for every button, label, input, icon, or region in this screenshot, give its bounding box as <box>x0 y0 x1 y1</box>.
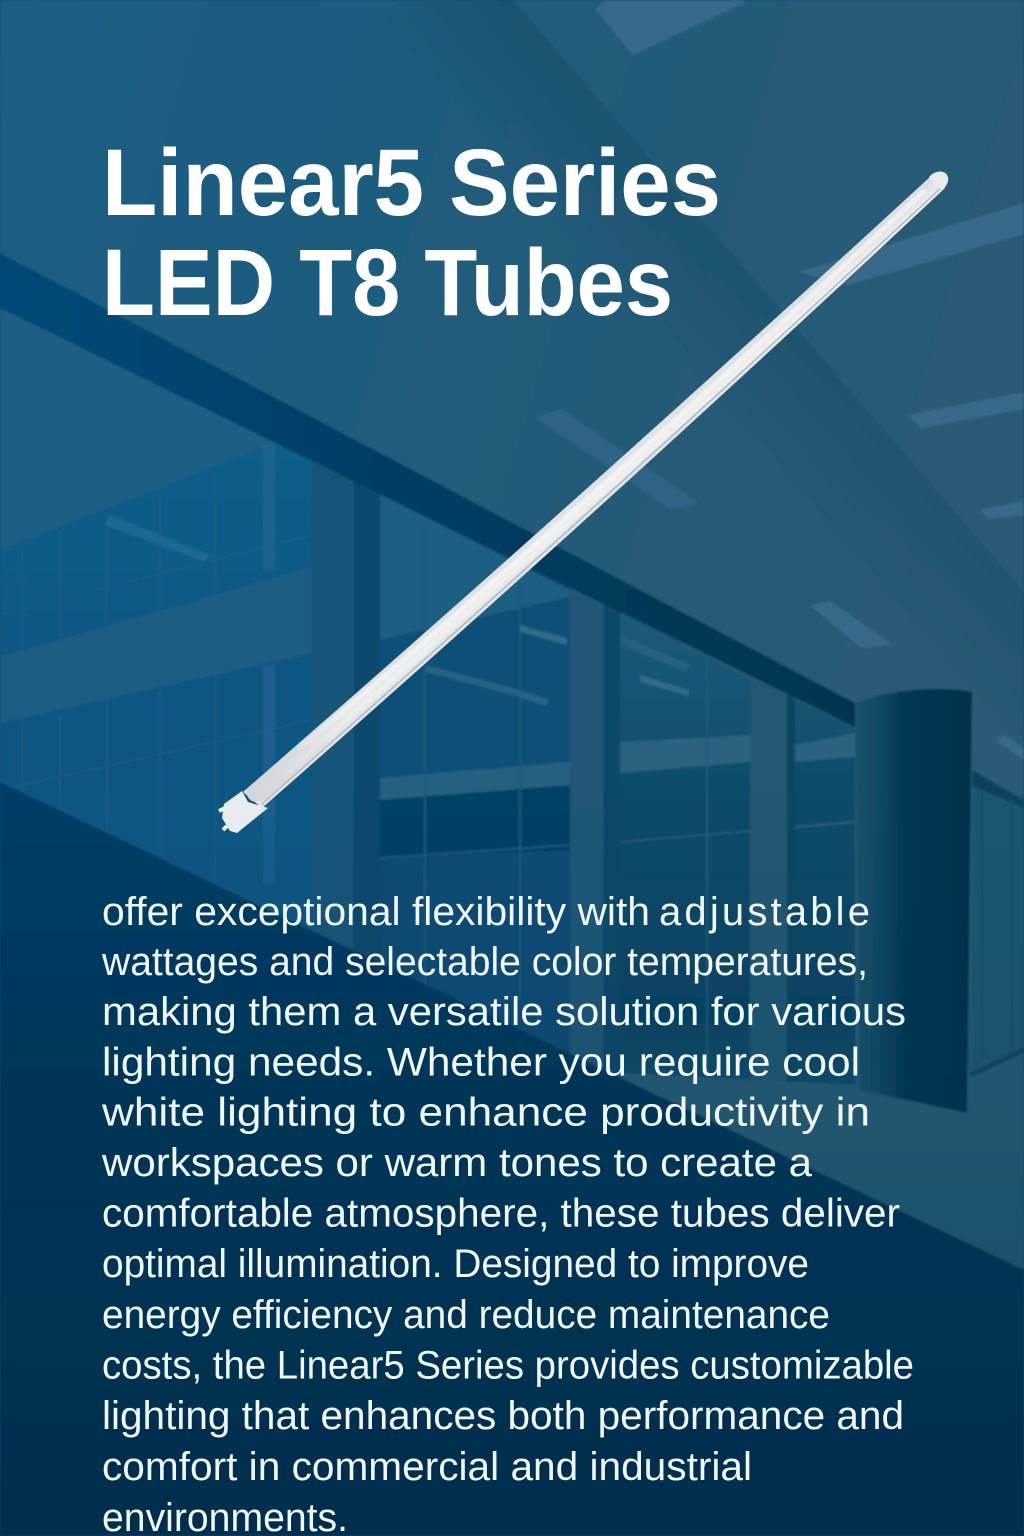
dark foreground wedge <box>0 782 1024 1536</box>
floor shadow line <box>970 1050 1024 1075</box>
body description: comfort in commercial and industrial <box>102 1445 752 1489</box>
centre window <box>380 494 570 1200</box>
LED T8 tube product image <box>219 171 948 833</box>
body description: costs, the Linear5 Series provides customizable <box>102 1344 914 1388</box>
body description: workspaces or warm tones to create a <box>101 1141 813 1185</box>
right window <box>620 612 750 1100</box>
tube body <box>243 176 945 808</box>
body description: adjustable <box>659 890 870 934</box>
left wall band <box>0 567 312 723</box>
body description: wattages and selectable color temperatures, <box>101 940 868 984</box>
tube lower edge line <box>262 186 943 804</box>
pillar <box>855 689 972 1113</box>
ceiling crease shading <box>300 0 1024 820</box>
body description <box>101 890 914 1536</box>
right wall and far windows <box>972 775 1024 1070</box>
tube centre highlight <box>300 190 925 748</box>
body description: lighting needs. Whether you require cool <box>102 1040 860 1084</box>
body description: comfortable atmosphere, these tubes deliver <box>102 1192 900 1236</box>
ceiling <box>0 0 1024 1100</box>
left upper window band <box>0 447 312 657</box>
body description: offer exceptional flexibility with <box>102 890 650 934</box>
ceiling light panels <box>535 0 1024 760</box>
milky cover near end <box>246 702 362 802</box>
body description: white lighting to enhance productivity in <box>101 1090 870 1134</box>
column three <box>750 678 787 1098</box>
column two <box>570 588 602 1208</box>
body description: energy efficiency and reduce maintenance <box>102 1293 830 1337</box>
title: LED T8 Tubes <box>102 230 673 336</box>
body description: lighting that enhances both performance and <box>102 1394 904 1438</box>
dark ceiling beam <box>0 253 855 727</box>
far end cap <box>929 171 948 190</box>
bottom darkening <box>0 780 1024 1536</box>
left lower window band <box>0 653 312 1000</box>
near end cap <box>222 791 268 833</box>
far window <box>795 699 855 1100</box>
title <box>102 130 721 336</box>
column one <box>312 450 352 1150</box>
body description: making them a versatile solution for various <box>102 990 906 1034</box>
left window mullions <box>0 470 312 880</box>
title: Linear5 Series <box>102 130 721 236</box>
left wall above windows <box>0 308 620 1100</box>
floor <box>620 1048 1024 1280</box>
near pins <box>219 808 227 830</box>
body description: optimal illumination. Designed to improve <box>102 1242 809 1286</box>
